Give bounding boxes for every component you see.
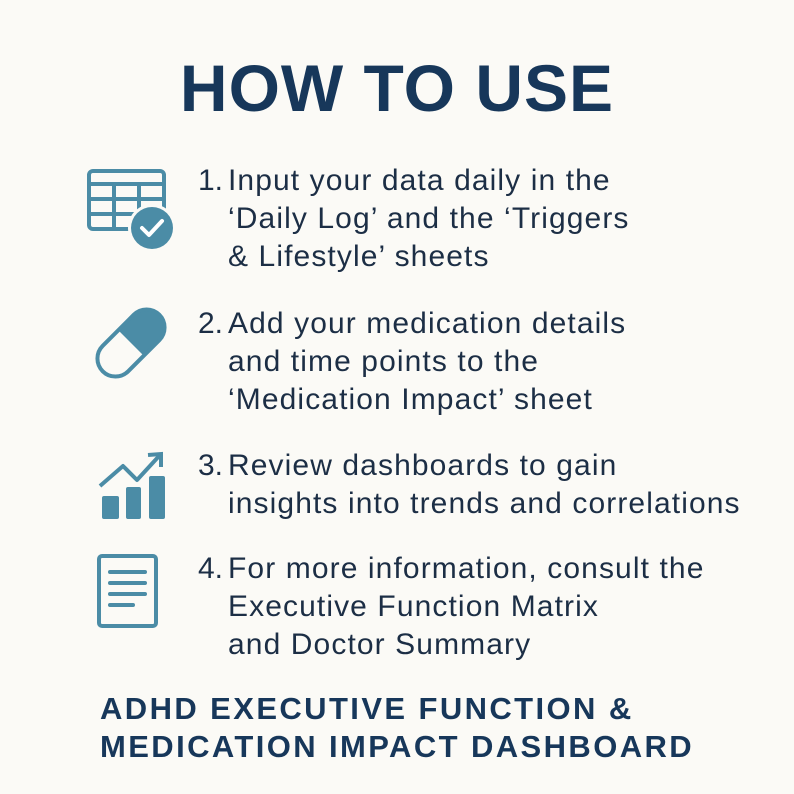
icon: chart bbox=[98, 452, 165, 519]
item 1: ‘Daily Log’ and the ‘Triggers bbox=[228, 202, 630, 235]
icon: document bbox=[97, 554, 158, 628]
item 4: Executive Function Matrix bbox=[228, 590, 599, 623]
item 1: 1. bbox=[198, 164, 223, 197]
item 1: Input your data daily in the bbox=[228, 164, 611, 197]
footer heading bbox=[100, 691, 694, 764]
item 3 bbox=[198, 449, 741, 520]
item 4: For more information, consult the bbox=[228, 552, 704, 585]
item 1: & Lifestyle’ sheets bbox=[228, 240, 490, 273]
icon: spreadsheet with check bbox=[87, 169, 173, 249]
item 4: 4. bbox=[198, 552, 223, 585]
item 4: and Doctor Summary bbox=[228, 628, 531, 661]
item 3: insights into trends and correlations bbox=[228, 487, 741, 520]
item 2: and time points to the bbox=[228, 345, 539, 378]
item 2: Add your medication details bbox=[228, 307, 626, 340]
item 2 bbox=[198, 307, 626, 416]
item 3: Review dashboards to gain bbox=[228, 449, 617, 482]
title: HOW TO USE bbox=[180, 51, 614, 125]
footer heading: MEDICATION IMPACT DASHBOARD bbox=[100, 729, 694, 764]
icon: pill bbox=[95, 308, 167, 378]
footer heading: ADHD EXECUTIVE FUNCTION & bbox=[100, 691, 634, 726]
item 4 bbox=[198, 552, 704, 661]
item 2: 2. bbox=[198, 307, 223, 340]
item 3: 3. bbox=[198, 449, 223, 482]
item 1 bbox=[198, 164, 630, 273]
item 2: ‘Medication Impact’ sheet bbox=[228, 383, 593, 416]
